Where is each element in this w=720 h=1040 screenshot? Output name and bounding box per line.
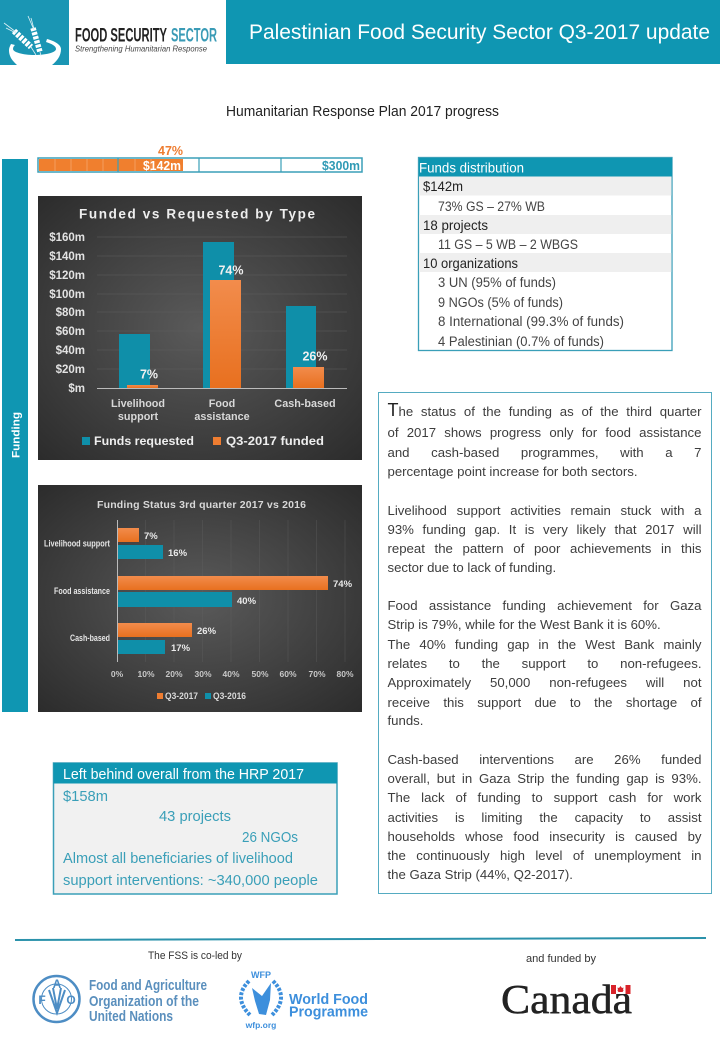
logo: WFP: wfp.org [245, 1020, 276, 1030]
bar chart: funding status 2017 vs 2016: Cash-based [70, 633, 110, 643]
bar chart: funded vs requested: support [118, 411, 158, 423]
bar chart: funded vs requested: Cash-based [274, 398, 336, 410]
text block: funding analysis: Strip is 79%, while for the West Bank it is 60%. [388, 616, 661, 632]
panel: funds distribution: 8 International (99.3% of funds) [438, 314, 624, 329]
icon: FAO emblem: O [66, 993, 76, 1007]
text block: funding analysis: the continuously high level of unemployment in [388, 848, 702, 862]
panel: funds distribution: 18 projects [423, 217, 488, 233]
text block: funding analysis: households whose food insecurity is caused by [388, 828, 702, 844]
bar chart: funding status 2017 vs 2016 [38, 485, 362, 712]
text block: funding analysis: sector due to lack of funding. [388, 560, 556, 574]
bar chart: funded vs requested [38, 196, 362, 460]
chart legend: Funds requested [94, 436, 194, 448]
bar chart: funded vs requested: $m [68, 383, 85, 395]
progress bar [38, 144, 362, 173]
logo wordmark [75, 26, 217, 54]
subtitle: Humanitarian Response Plan 2017 progress [226, 104, 499, 120]
bar chart: funding status 2017 vs 2016: 74% [333, 579, 353, 590]
text block: funding analysis: receive this support due to the shortage of [388, 694, 702, 710]
panel: funds distribution: 11 GS – 5 WB – 2 WBGS [438, 237, 578, 252]
bar chart: funding status 2017 vs 2016: 80% [336, 669, 354, 679]
bar chart: funding status 2017 vs 2016: 17% [171, 643, 191, 654]
logo: Canada: Canada [501, 976, 632, 1022]
panel: left behind [54, 763, 337, 894]
text block: funding analysis: and cash-based programmes, with a 7 [388, 444, 702, 460]
icon: FAO emblem: A [53, 977, 62, 991]
icon: flag [611, 985, 630, 994]
logo: FAO: Food and Agriculture [89, 977, 207, 994]
icon: FAO emblem [34, 976, 80, 1022]
chart title: Funding Status 3rd quarter 2017 vs 2016 [97, 499, 306, 511]
text block: funding analysis: activities is limiting the capacity to assist [388, 810, 702, 824]
logo: WFP: Programme [289, 1004, 368, 1020]
bar chart: funded vs requested: 7% [140, 368, 158, 382]
bar chart: funded vs requested: Livelihood [111, 398, 165, 410]
bar chart: funded vs requested: $80m [56, 307, 85, 319]
logo: WFP [241, 970, 368, 1030]
logo: WFP: WFP [251, 970, 271, 980]
text block: funding analysis: repeat the pattern of poor achievements in this [388, 540, 702, 556]
logo: WFP: World Food [289, 992, 368, 1008]
panel: funds distribution: 3 UN (95% of funds) [438, 275, 556, 290]
panel header: Left behind overall from the HRP 2017 [63, 766, 304, 783]
bar chart: funded vs requested: 74% [218, 264, 244, 278]
panel: left behind: Almost all beneficiaries of livelihood [63, 851, 293, 867]
bar chart: funding status 2017 vs 2016: 16% [168, 548, 188, 559]
panel: funds distribution: 73% GS – 27% WB [438, 199, 545, 214]
panel: left behind: 26 NGOs [242, 830, 298, 846]
bar chart: funded vs requested: $140m [49, 251, 85, 263]
bar chart: funded vs requested: $20m [56, 364, 85, 376]
panel: left behind: 43 projects [159, 809, 231, 825]
bar chart: funding status 2017 vs 2016: Food assistance [54, 586, 110, 596]
footer rule [15, 938, 706, 940]
bar chart: funding status 2017 vs 2016: Livelihood support [44, 538, 110, 548]
bar chart: funded vs requested: 26% [302, 350, 328, 364]
sidebar: Funding: Funding [10, 412, 22, 458]
funded-by caption: and funded by [526, 953, 596, 965]
chart legend: Q3-2017 [165, 691, 198, 701]
chart legend [157, 691, 246, 701]
bar chart: funded vs requested: $120m [49, 270, 85, 282]
text block: funding analysis: funds. [388, 712, 423, 728]
text block: funding analysis [378, 392, 712, 894]
table header: Funds distribution [419, 160, 524, 176]
text block: funding analysis: Livelihood support activities remain stuck with a [388, 502, 702, 518]
sidebar: Funding [2, 159, 28, 712]
funded value: $142m [143, 159, 181, 173]
panel: funds distribution: $142m [423, 178, 463, 194]
text block: funding analysis: overall, but in Gaza Strip the funding gap is 93%. [388, 770, 702, 786]
percentage label: 47% [158, 144, 183, 158]
logo wordmark: Strengthening Humanitarian Response [75, 44, 207, 54]
co-led caption: The FSS is co-led by [148, 950, 242, 962]
bar chart: funded vs requested: assistance [194, 411, 250, 423]
text block: funding analysis: The 40% funding gap in the West Bank mainly [388, 636, 702, 652]
text block: funding analysis: The lack of funding to support cash for work [388, 790, 702, 804]
text block: funding analysis: Food assistance funding achievement for Gaza [388, 598, 702, 612]
text block: funding analysis: 93% funding gap. It is very likely that 2017 will [388, 522, 702, 536]
chart legend [82, 436, 324, 448]
text block: funding analysis: of 2017 shows progress only for food assistance [388, 425, 702, 440]
chart legend: Q3-2017 funded [226, 436, 324, 448]
icon: WFP wreath [241, 981, 281, 1016]
bar chart: funding status 2017 vs 2016: 70% [308, 669, 326, 679]
panel: funds distribution: 4 Palestinian (0.7% of funds) [438, 334, 604, 349]
icon: FAO emblem: F [38, 993, 46, 1007]
logo: FAO [34, 976, 207, 1025]
logo wordmark: FOOD SECURITY [75, 26, 167, 46]
text block: funding analysis: relates to the support to non-refugees. [388, 656, 702, 670]
text block: funding analysis: The status of the funding as of the third quarter [388, 400, 702, 420]
chart legend: Q3-2016 [213, 691, 246, 701]
bar chart: funded vs requested: Food [209, 398, 235, 410]
panel: left behind: $158m [63, 789, 108, 805]
header logo panel [0, 0, 217, 65]
text block: funding analysis: Cash-based interventions are 26% funded [388, 752, 702, 766]
text block: funding analysis: Approximately 50,000 non-refugees will not [388, 674, 702, 690]
title banner: Palestinian Food Security Sector Q3-2017 update [249, 20, 710, 44]
bar chart: funding status 2017 vs 2016: 50% [251, 669, 269, 679]
bar chart: funding status 2017 vs 2016: 40% [222, 669, 240, 679]
panel: funds distribution: 10 organizations [423, 255, 518, 271]
bar chart: funded vs requested: $40m [56, 345, 85, 357]
bar chart: funding status 2017 vs 2016: 26% [197, 626, 217, 637]
panel: funds distribution [418, 158, 672, 350]
chart title: Funded vs Requested by Type [79, 206, 315, 222]
logo: FAO: Organization of the [89, 993, 199, 1010]
text block: funding analysis: the Gaza Strip (44%, Q2-2017). [388, 866, 573, 882]
bar chart: funded vs requested: $160m [49, 232, 85, 244]
bar chart: funded vs requested: $100m [49, 289, 85, 301]
bar chart: funding status 2017 vs 2016: 40% [237, 596, 257, 607]
text block: funding analysis: percentage point increase for both sectors. [388, 464, 637, 478]
logo wordmark: SECTOR [171, 26, 217, 46]
logo: FAO: United Nations [89, 1008, 173, 1025]
bar chart: funded vs requested: $60m [56, 326, 85, 338]
bar chart: funding status 2017 vs 2016: 10% [137, 669, 155, 679]
title banner [226, 0, 720, 64]
bar chart: funding status 2017 vs 2016: 20% [165, 669, 183, 679]
panel: left behind: support interventions: ~340,000 people [63, 873, 318, 889]
bar chart: funding status 2017 vs 2016: 30% [194, 669, 212, 679]
panel: funds distribution: 9 NGOs (5% of funds) [438, 295, 563, 310]
bar chart: funding status 2017 vs 2016: 0% [111, 669, 124, 679]
bar chart: funding status 2017 vs 2016: 60% [279, 669, 297, 679]
table header [419, 158, 672, 176]
bar chart: funding status 2017 vs 2016: 7% [144, 531, 158, 542]
target value: $300m [322, 159, 360, 173]
icon: wheat and bowl [4, 16, 61, 65]
